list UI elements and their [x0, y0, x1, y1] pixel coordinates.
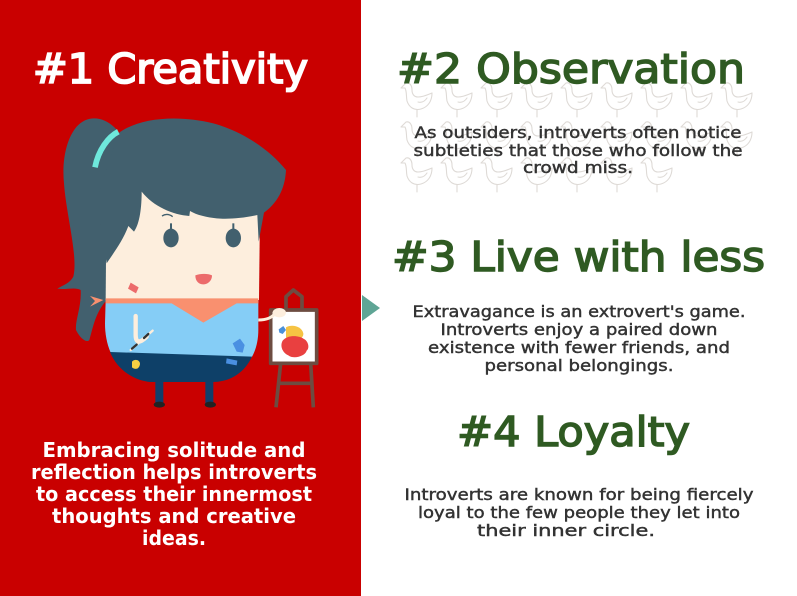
- text: live with less description: Introverts enjoy a paired down: [440, 320, 718, 339]
- text: loyalty description: loyal to the few people they let into: [418, 503, 740, 522]
- left description: ideas.: [142, 526, 206, 550]
- shirt: [105, 300, 258, 357]
- painting blobs: [279, 326, 308, 357]
- hen pattern background: [401, 83, 752, 192]
- left description: Embracing solitude and: [42, 438, 306, 462]
- body face: [106, 187, 260, 300]
- left description: thoughts and creative: [52, 504, 296, 528]
- arm to easel: [258, 313, 275, 320]
- text: live with less description: personal belongings.: [484, 356, 674, 375]
- trousers: [110, 352, 252, 382]
- heading: #2 Observation: #2 Observation: [397, 45, 745, 93]
- text: observation description: As outsiders, introverts often notice: [414, 123, 742, 142]
- left description: to access their innermost: [36, 482, 312, 506]
- ponytail: [57, 118, 140, 341]
- text: loyalty description: [404, 485, 754, 540]
- legs and feet: [154, 382, 216, 408]
- mouth: [195, 274, 212, 284]
- text: live with less description: existence with fewer friends, and: [428, 338, 730, 357]
- illustration: girl painter: [57, 118, 317, 408]
- paint smudges: [90, 283, 245, 369]
- collar: [106, 298, 258, 323]
- text: loyalty description: their inner circle.: [477, 521, 655, 540]
- heading: #3 Live with less: #3 Live with less: [392, 233, 765, 281]
- white right panel: [361, 0, 797, 596]
- text: observation description: [414, 123, 742, 177]
- left description: [31, 438, 317, 550]
- easel: [271, 290, 317, 407]
- left description: reflection helps introverts: [31, 460, 317, 484]
- text: loyalty description: Introverts are known for being fiercely: [404, 485, 754, 504]
- text: live with less description: [412, 302, 746, 375]
- eyes: [162, 214, 241, 247]
- text: live with less description: Extravagance is an extrovert's game.: [412, 302, 746, 321]
- hair top: [97, 118, 286, 263]
- text: observation description: crowd miss.: [523, 158, 633, 177]
- arm holding brush: [131, 316, 153, 350]
- heading: #4 Loyalty: #4 Loyalty: [457, 408, 690, 456]
- text: observation description: subtleties that those who follow the: [414, 141, 742, 160]
- hair tie: [95, 132, 118, 167]
- title: #1 Creativity: #1 Creativity: [33, 45, 308, 93]
- arrow connector: [362, 295, 380, 321]
- red left panel: [0, 0, 361, 596]
